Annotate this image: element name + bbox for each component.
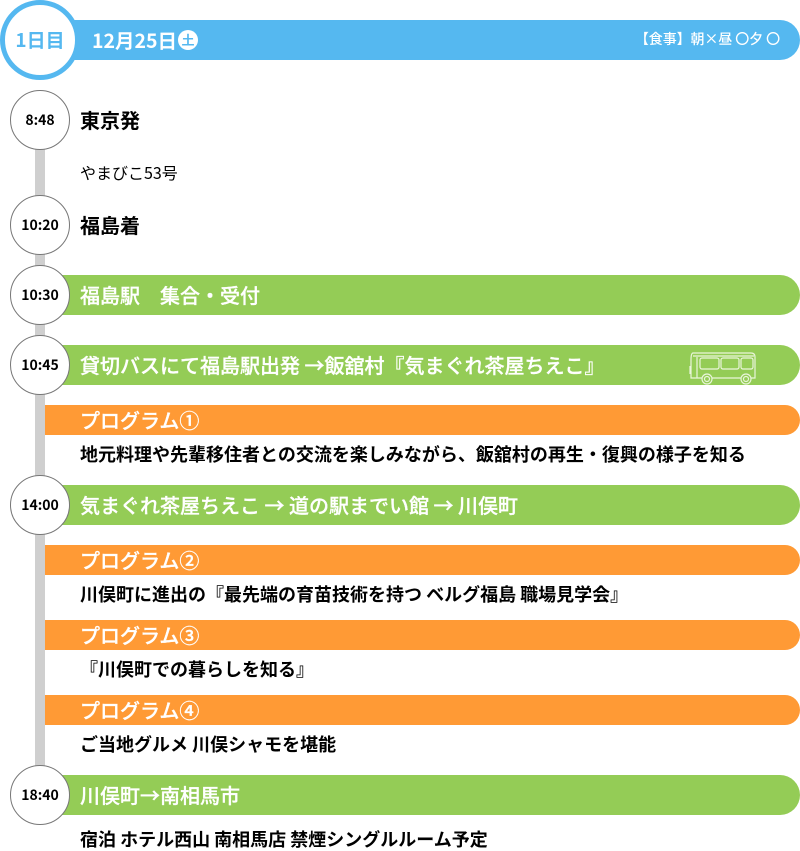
icon: saturday badge xyxy=(178,30,198,50)
time 14:00: 14:00 xyxy=(21,495,59,515)
heading: Fukushima arrival: 福島着 xyxy=(80,210,140,239)
orange bar: program 2: プログラム② xyxy=(80,545,199,574)
date: 12月25日 xyxy=(92,25,177,54)
orange bar: program 1: プログラム① xyxy=(80,405,199,434)
green bar: chartered bus: 貸切バスにて福島駅出発 →飯舘村『気まぐれ茶屋ちえこ』 xyxy=(80,350,604,379)
day header bar xyxy=(40,20,800,60)
orange bar: program 3: プログラム③ xyxy=(80,620,199,649)
icon: bus xyxy=(689,352,756,385)
green bar: to Minamisoma xyxy=(40,775,800,815)
time 10:45 xyxy=(10,335,70,395)
orange bar: program 4 xyxy=(45,695,800,725)
day badge xyxy=(0,0,80,80)
program 2 text: 川俣町に進出の『最先端の育苗技術を持つ ベルグ福島 職場見学会』 xyxy=(80,581,628,607)
time 18:40 xyxy=(10,765,70,825)
timeline spine xyxy=(35,120,45,780)
green bar: route: 気まぐれ茶屋ちえこ → 道の駅までい館 → 川俣町 xyxy=(80,490,518,519)
orange bar: program 1 xyxy=(45,405,800,435)
green bar: Fukushima station xyxy=(40,275,800,315)
time 14:00 xyxy=(10,475,70,535)
program 1 text: 地元料理や先輩移住者との交流を楽しみながら、飯舘村の再生・復興の様子を知る xyxy=(80,441,746,467)
time 18:40: 18:40 xyxy=(21,785,59,805)
day badge: 1日目 xyxy=(15,26,65,53)
time 10:30: 10:30 xyxy=(21,285,59,305)
program 3 text: 『川俣町での暮らしを知る』 xyxy=(80,656,314,682)
orange bar: program 3 xyxy=(45,620,800,650)
time 10:20: 10:20 xyxy=(21,215,59,235)
program 4 text: ご当地グルメ 川俣シャモを堪能 xyxy=(80,731,336,757)
heading: Tokyo departure: 東京発 xyxy=(80,105,140,134)
time 8:48 xyxy=(10,90,70,150)
green bar: route xyxy=(40,485,800,525)
time 10:30 xyxy=(10,265,70,325)
green bar: to Minamisoma: 川俣町→南相馬市 xyxy=(80,780,240,809)
orange bar: program 4: プログラム④ xyxy=(80,695,199,724)
meals: 【食事】朝×昼 〇夕 〇 xyxy=(635,29,780,49)
green bar: chartered bus xyxy=(40,345,800,385)
time 10:20 xyxy=(10,195,70,255)
time 10:45: 10:45 xyxy=(21,355,59,375)
icon: saturday badge: 土 xyxy=(181,30,194,49)
orange bar: program 2 xyxy=(45,545,800,575)
green bar: Fukushima station: 福島駅 集合・受付 xyxy=(80,280,260,309)
train name: やまびこ53号 xyxy=(80,160,178,184)
time 8:48: 8:48 xyxy=(25,110,55,130)
